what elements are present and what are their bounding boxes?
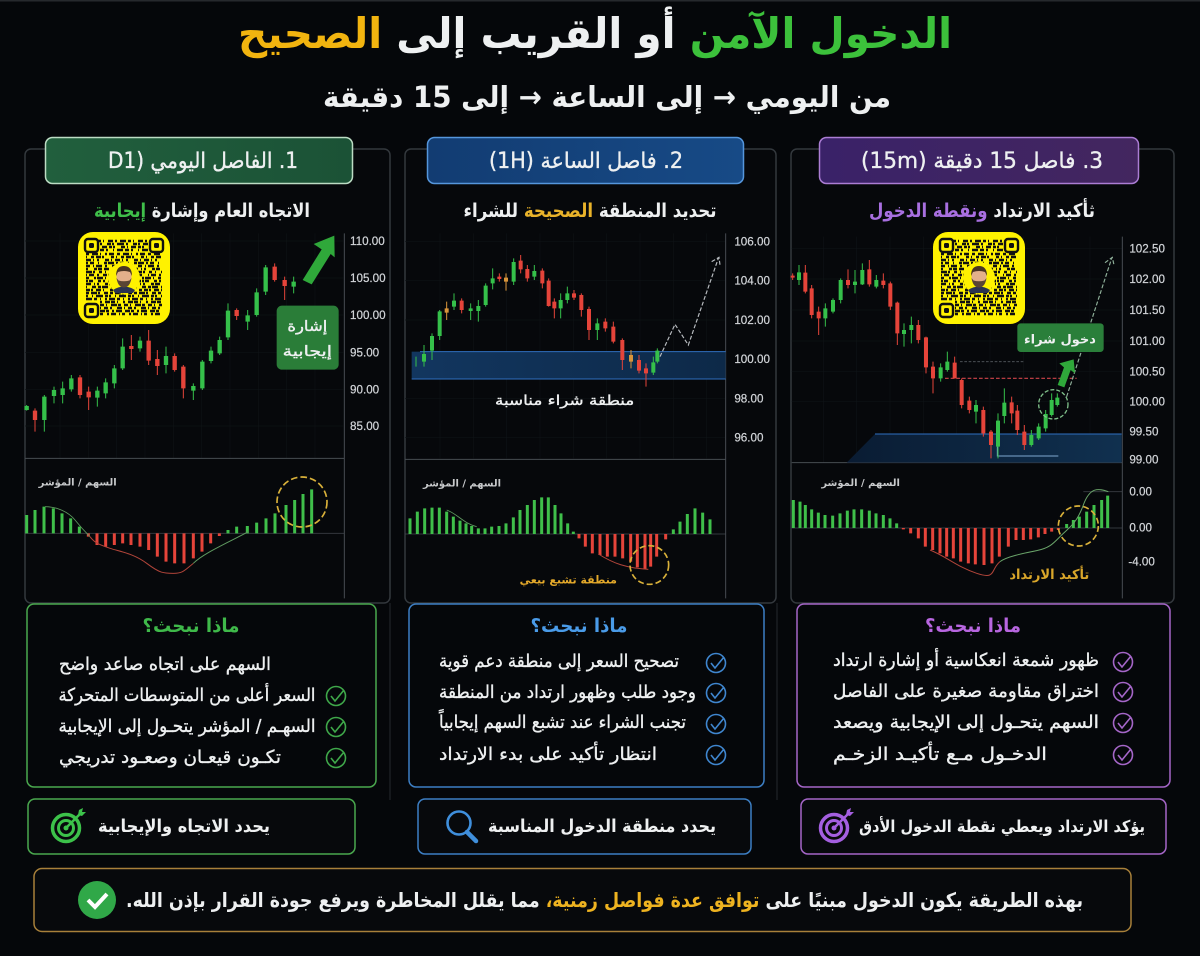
price axis labels: 105.00 [350, 272, 386, 285]
box 2 list [438, 651, 696, 765]
box: what to look for, 15 minute [797, 604, 1170, 787]
price axis labels: 98.00 [734, 392, 764, 405]
resistance lines [945, 362, 1077, 378]
takeaway: 15 minute: يؤكد الارتداد ويعطي نقطة الدخول الأدق [859, 816, 1145, 837]
price axis labels: -4.00 [1128, 555, 1155, 568]
price axis labels [1128, 242, 1165, 568]
candlesticks [793, 260, 1057, 458]
box 1 list: السعر أعلى من المتوسطات المتحركة [58, 683, 316, 706]
price axis labels [734, 236, 770, 444]
price axis labels: 0.00 [1129, 521, 1153, 534]
box 3 list: اختراق مقاومة صغيرة على الفاصل [833, 681, 1099, 702]
price axis labels: 100.00 [1129, 396, 1165, 409]
panel 3 header: 3. فاصل 15 دقيقة (15m) [861, 149, 1103, 174]
price axis labels: 85.00 [350, 420, 380, 433]
indicator histogram [792, 490, 1122, 576]
price axis labels: 110.00 [350, 235, 385, 248]
green entry circle [1039, 390, 1068, 419]
conclusion bar [34, 868, 1131, 932]
icon: check badge [78, 881, 116, 919]
panel 1 subheading: الاتجاه العام وإشارة إيجابية [94, 200, 310, 222]
panel 1 header [46, 138, 352, 184]
box 1 list: تكـون قيعـان وصعـود تدريجي [59, 747, 281, 768]
candlesticks [416, 255, 657, 387]
title: الدخول الآمن أو القريب إلى الصحيح [238, 6, 952, 59]
panel 2 chart [405, 233, 770, 598]
QR code sticker right [933, 232, 1025, 324]
box 1 heading: ماذا نبحث؟ [142, 615, 240, 637]
box 3 list: ظهور شمعة انعكاسية أو إشارة ارتداد [833, 648, 1099, 671]
box: what to look for, hourly [409, 604, 764, 787]
price axis labels: 106.00 [734, 236, 770, 249]
box 3 list: السهم يتحـول إلى الإيجابية ويصعد [833, 712, 1099, 733]
dashed projection arrow [1067, 257, 1114, 397]
indicator histogram [405, 497, 726, 569]
box 2 check icons [706, 654, 726, 764]
reversal confirmation label: تأكيد الارتداد [1009, 565, 1089, 583]
highlight circle [630, 546, 669, 584]
panel 2 header [428, 138, 744, 184]
box 3 heading: ماذا نبحث؟ [925, 615, 1021, 637]
box 3 list [833, 648, 1099, 765]
icon: target green [52, 808, 86, 842]
panel 2 header: 2. فاصل الساعة (1H) [489, 149, 683, 174]
price axis labels: 102.00 [1129, 273, 1165, 286]
price axis labels: 102.00 [734, 314, 770, 327]
callout: buy entry [1017, 323, 1104, 352]
box 1 check icons [326, 686, 346, 768]
highlight circle [1058, 506, 1098, 546]
icon: magnifying glass [448, 812, 476, 841]
takeaway: daily [28, 799, 355, 854]
panel: 15 minute timeframe [791, 138, 1174, 603]
box 2 list: انتظار تأكيد على بدء الارتداد [439, 741, 657, 765]
box 3 check icons [1114, 652, 1132, 764]
icon: up arrow [1058, 359, 1075, 387]
price axis labels: 0.00 [1129, 486, 1153, 499]
price axis labels: 99.00 [1129, 453, 1159, 466]
indicator label: السهم / المؤشر [422, 479, 501, 490]
price axis labels: 104.00 [734, 275, 770, 288]
price axis labels: 101.50 [1129, 304, 1165, 317]
indicator label: السهم / المؤشر [38, 477, 117, 488]
panel 3 header [820, 138, 1138, 184]
indicator histogram [25, 489, 344, 573]
price axis labels: 100.50 [1129, 366, 1165, 379]
box 2 heading: ماذا نبحث؟ [530, 615, 628, 637]
icon: up arrow [303, 236, 335, 284]
box 1 list: السهـم / المؤشر يتحـول إلى الإيجابية [58, 716, 316, 737]
price axis labels [350, 235, 386, 433]
callout: positive signal: إشارة [287, 318, 327, 335]
price axis labels: 102.50 [1129, 242, 1165, 255]
callout: buy entry: دخول شراء [1024, 331, 1097, 346]
box: what to look for, daily [27, 604, 376, 787]
buy zone label: منطقة شراء مناسبة [495, 393, 634, 409]
takeaway: daily: يحدد الاتجاه والإيجابية [98, 817, 270, 837]
panel 1 header: 1. الفاصل اليومي (D1 [108, 149, 298, 174]
box 2 list: تجنب الشراء عند تشبع السهم إيجابياً [438, 709, 686, 733]
highlight circle [277, 477, 327, 527]
conclusion text: بهذه الطريقة يكون الدخول مبنيًا على توافق عدة فواصل زمنية، مما يقلل المخاطرة ويرفع جودة القرار بإذن الله. [126, 888, 1083, 912]
box 3 list: الدخـول مـع تأكيـد الزخـم [833, 741, 1047, 765]
box 2 list: وجود طلب وظهور ارتداد من المنطقة [439, 682, 696, 703]
buy zone band [412, 352, 726, 379]
price axis labels: 100.00 [734, 353, 770, 366]
price axis labels: 90.00 [350, 383, 380, 396]
price axis labels: 99.50 [1129, 426, 1159, 439]
price axis labels: 96.00 [734, 431, 764, 444]
box 1 list [58, 654, 316, 768]
takeaway: 15 minute [801, 799, 1166, 854]
panel 2 subheading: تحديد المنطقة الصحيحة للشراء [463, 200, 716, 222]
callout: positive signal [277, 306, 339, 370]
QR code sticker left [78, 232, 170, 324]
subtitle: من اليومي → إلى الساعة → إلى 15 دقيقة [323, 80, 891, 115]
panel 1 chart [25, 233, 386, 598]
icon: target purple [820, 808, 854, 842]
panel 3 subheading: ثأكيد الارتداد ونقطة الدخول [869, 198, 1095, 222]
price axis labels: 100.00 [350, 309, 386, 322]
panel: daily timeframe [25, 138, 390, 603]
takeaway: hourly: يحدد منطقة الدخول المناسبة [488, 817, 716, 837]
box 2 list: تصحيح السعر إلى منطقة دعم قوية [439, 651, 679, 672]
price axis labels: 101.00 [1129, 335, 1165, 348]
indicator label: السهم / المؤشر [820, 478, 900, 489]
dashed projection arrow [660, 257, 720, 357]
panel: hourly timeframe [405, 138, 776, 603]
box 1 list: السهم على اتجاه صاعد واضح [59, 654, 271, 675]
candlesticks [27, 263, 294, 432]
callout: positive signal: إيجابية [283, 343, 332, 360]
oversold label: منطقة تشبع بيعي [520, 573, 617, 586]
support zone band [847, 434, 1122, 463]
panel 3 chart [792, 237, 1165, 598]
takeaway: hourly [418, 799, 751, 854]
price axis labels: 95.00 [350, 346, 380, 359]
